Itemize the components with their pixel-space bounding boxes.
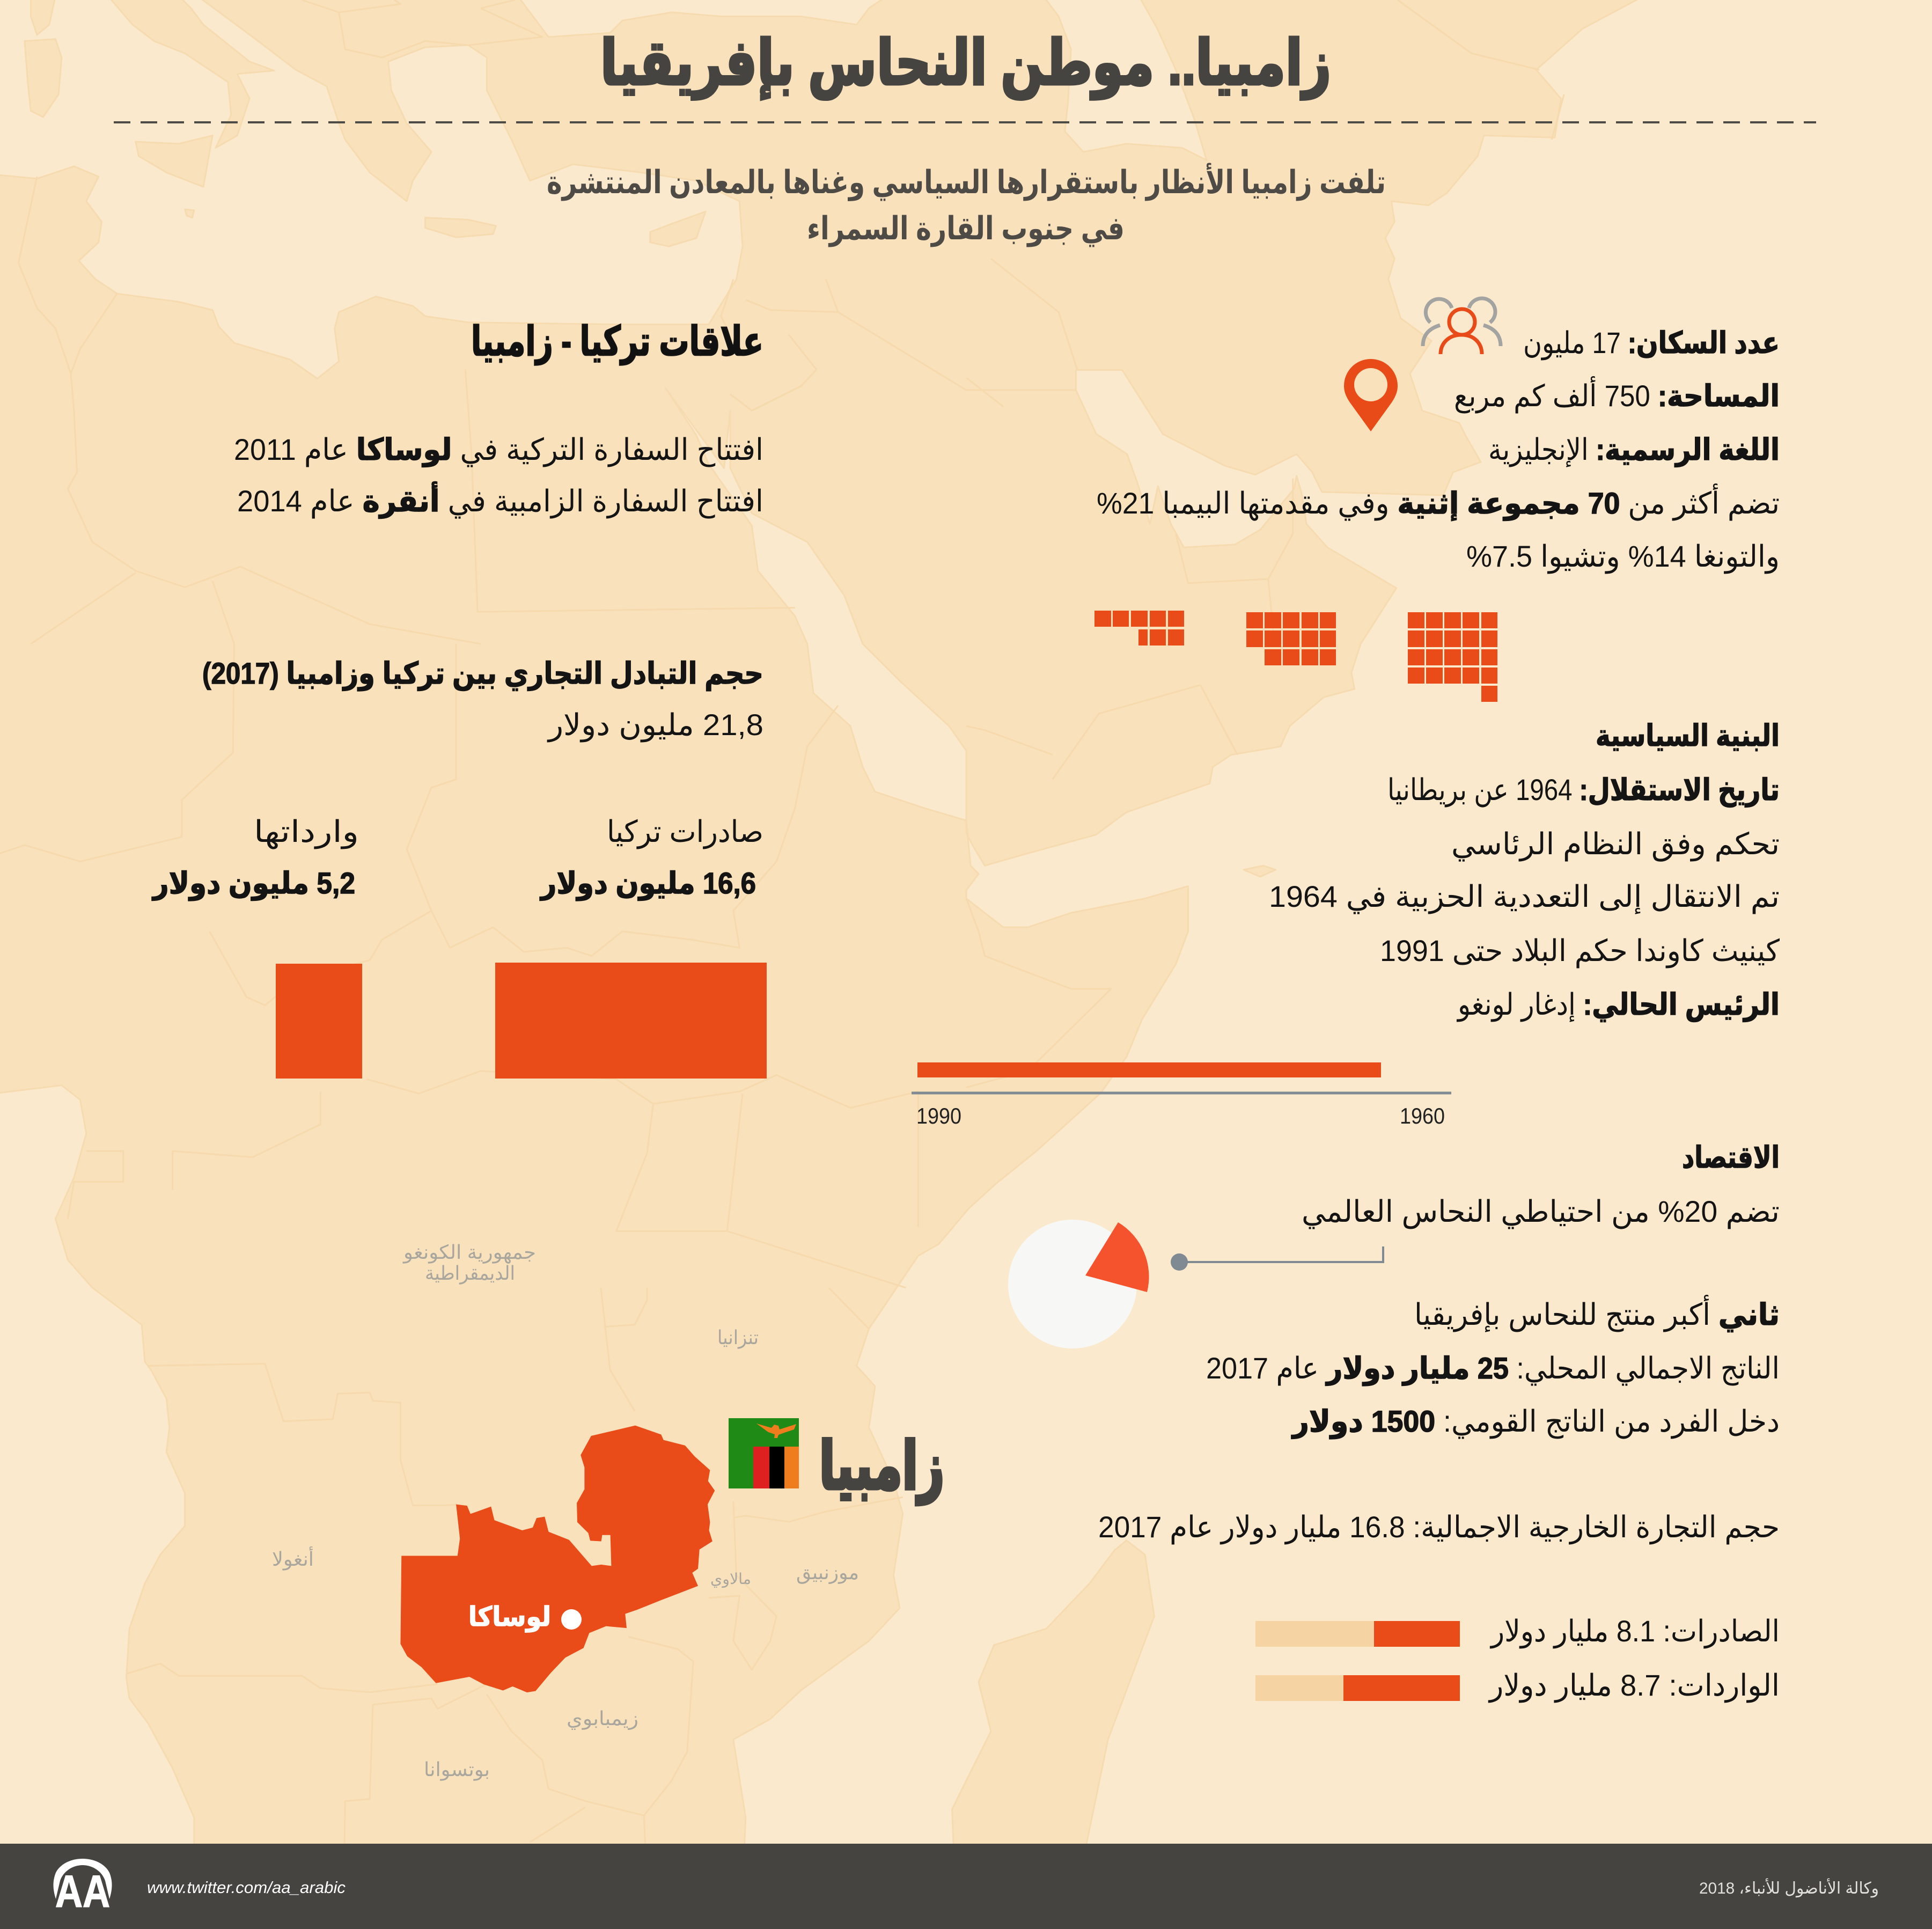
chart: Turkey exports bar (495, 815, 767, 1079)
chart: ethnic group squares (1094, 611, 1497, 702)
subtitle (547, 163, 1386, 247)
exports row (1255, 1614, 1780, 1649)
dashed divider (114, 121, 1816, 123)
chart: Turkey imports bar: وارداتها (254, 815, 359, 849)
chart: Turkey imports bar: 5,2 مليون دولار (151, 866, 355, 901)
panel: Turkey-Zambia relations: افتتاح السفارة التركية في لوساكا عام 2011 (234, 432, 763, 467)
panel: country facts: المساحة: 750 ألف كم مربع (1454, 376, 1780, 414)
panel: Turkey-Zambia relations: علاقات تركيا - زامبيا (471, 319, 763, 365)
chart: Turkey imports bar (151, 815, 362, 1079)
icon: location pin (1344, 359, 1398, 431)
panel: Turkey-Zambia relations: افتتاح السفارة الزامبية في أنقرة عام 2014 (237, 481, 763, 519)
exports row: الصادرات: 8.1 مليار دولار (1489, 1614, 1780, 1649)
footer: credit: وكالة الأناضول للأنباء، 2018 (1699, 1877, 1879, 1898)
panel: country facts: والتونغا 14% وتشيوا 7.5% (1466, 539, 1780, 574)
panel: Turkey-Zambia relations: حجم التبادل التجاري بين تركيا وزامبيا (2017) (202, 656, 763, 691)
chart: Turkey exports bar: صادرات تركيا (607, 815, 763, 849)
squares: Chewa 7.5% (1094, 611, 1184, 646)
panel: political structure: البنية السياسية (1596, 718, 1780, 752)
footer bar (0, 1844, 1932, 1929)
panel: Turkey-Zambia relations: 21,8 مليون دولار (547, 708, 763, 743)
panel: political structure (1269, 718, 1780, 1023)
panel: country facts (1097, 326, 1780, 574)
country name labels: تنزانيا (717, 1326, 759, 1349)
country name labels: جمهورية الكونغو (402, 1241, 536, 1264)
chart: exports and imports (1255, 1614, 1780, 1703)
capital marker: Lusaka: لوساكا (468, 1602, 551, 1633)
icon: Anadolu Agency logo: AA (55, 1866, 110, 1917)
title: زامبيا.. موطن النحاس بإفريقيا (600, 28, 1331, 100)
subtitle: في جنوب القارة السمراء (807, 210, 1125, 247)
country name labels: موزنبيق (796, 1561, 859, 1584)
country name labels: الديمقراطية (425, 1262, 515, 1285)
panel: country facts: اللغة الرسمية: الإنجليزية (1488, 432, 1780, 467)
chart: copper reserves pie (1008, 1220, 1149, 1348)
callout connector (1171, 1246, 1383, 1271)
chart: timeline 1960-1990: 1960 (1400, 1103, 1445, 1128)
imports row (1255, 1668, 1780, 1703)
panel: economy: تضم 20% من احتياطي النحاس العالمي (1302, 1194, 1780, 1229)
panel: political structure: الرئيس الحالي: إدغار لونغو (1456, 987, 1780, 1023)
country name labels: زيمبابوي (567, 1707, 638, 1730)
country name labels: بوتسوانا (424, 1758, 490, 1781)
panel: political structure: تاريخ الاستقلال: 1964 عن بريطانيا (1387, 773, 1780, 808)
country name: Zambia: زامبيا (819, 1429, 944, 1505)
country name labels: مالاوي (710, 1571, 751, 1588)
imports row: الواردات: 8.7 مليار دولار (1488, 1668, 1780, 1703)
panel: political structure: تحكم وفق النظام الرئاسي (1451, 827, 1780, 862)
squares: Tonga 14% (1246, 612, 1336, 665)
panel: economy: الناتج الاجمالي المحلي: 25 مليار دولار عام 2017 (1206, 1351, 1780, 1386)
country name labels (272, 1241, 859, 1781)
panel: economy: دخل الفرد من الناتج القومي: 1500 دولار (1291, 1404, 1780, 1439)
footer: twitter address: www.twitter.com/aa_arabic (147, 1878, 346, 1897)
panel: economy: حجم التجارة الخارجية الاجمالية: 16.8 مليار دولار عام 2017 (1098, 1510, 1780, 1545)
panel: Turkey-Zambia relations (202, 319, 763, 743)
panel: country facts: عدد السكان: 17 مليون (1523, 326, 1780, 361)
panel: economy: الاقتصاد (1682, 1140, 1780, 1174)
panel: political structure: كينيث كاوندا حكم البلاد حتى 1991 (1380, 934, 1780, 969)
chart: Turkey exports bar: 16,6 مليون دولار (539, 866, 756, 901)
chart: timeline 1960-1990 (912, 1062, 1451, 1128)
subtitle: تلفت زامبيا الأنظار باستقرارها السياسي وغناها بالمعادن المنتشرة (547, 163, 1386, 201)
panel: political structure: تم الانتقال إلى التعددية الحزبية في 1964 (1269, 879, 1780, 915)
panel: economy: ثاني أكبر منتج للنحاس بإفريقيا (1414, 1295, 1780, 1333)
chart: timeline 1960-1990: 1990 (916, 1103, 961, 1128)
squares: Bemba 21% (1408, 612, 1497, 702)
icon: people (1423, 298, 1501, 354)
icon: flag of Zambia (729, 1418, 799, 1488)
panel: economy (1098, 1140, 1780, 1545)
map: Zambia highlighted (400, 1426, 715, 1692)
panel: country facts: تضم أكثر من 70 مجموعة إثنية وفي مقدمتها البيمبا 21% (1097, 483, 1780, 521)
country name labels: أنغولا (272, 1546, 314, 1571)
